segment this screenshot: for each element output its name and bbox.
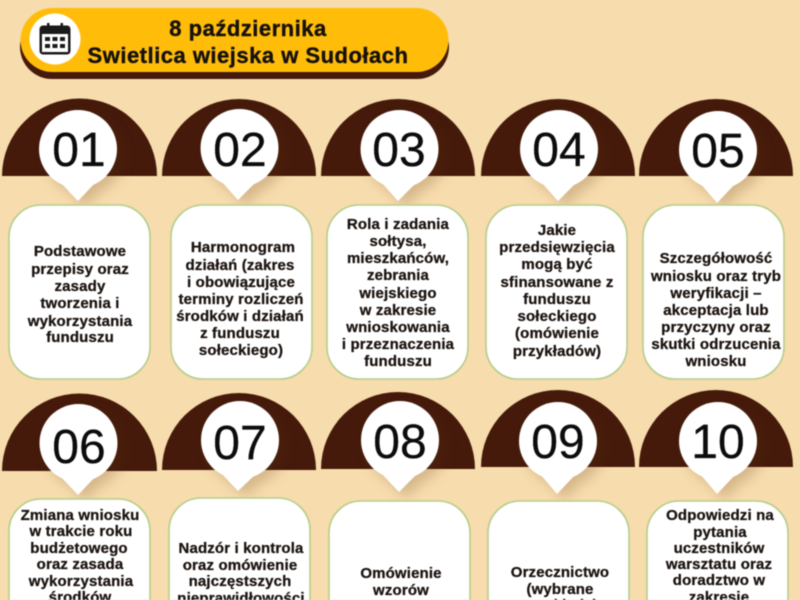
step 04: sołeckiego	[517, 308, 597, 325]
step 04: przedsięwzięcia	[499, 239, 615, 256]
step 05: przyczyny oraz	[661, 319, 771, 336]
step 10: doradztwo w	[673, 572, 765, 589]
heading: Swietlica wiejska w Sudołach	[88, 43, 408, 68]
step 04: Jakie	[538, 222, 576, 239]
step 05: wniosku oraz tryb	[650, 268, 781, 285]
step 04: 04	[532, 124, 586, 177]
step 02: Harmonogram	[191, 239, 295, 256]
step 06	[2, 394, 157, 600]
step 09: Orzecznictwo	[511, 564, 609, 581]
step 05: akceptacja lub	[663, 302, 769, 319]
step 06: budżetowego	[30, 540, 128, 557]
step 02: środków i działań	[176, 308, 304, 325]
step 04: mogą być	[521, 256, 593, 273]
step 05: wniosku	[684, 353, 747, 370]
step 04	[481, 99, 635, 379]
step 03: i przeznaczenia	[342, 336, 455, 353]
step 03	[321, 99, 475, 379]
icon: calendar	[30, 14, 80, 64]
step 03: Rola i zadania	[347, 216, 450, 233]
step 10: uczestników	[674, 540, 765, 557]
step 02	[162, 99, 316, 379]
step 02: i obowiązujące	[187, 274, 295, 291]
step 01: 01	[52, 124, 106, 177]
step 07: Nadzór i kontrola	[178, 540, 304, 557]
step 04: funduszu	[523, 291, 591, 308]
step 07: 07	[213, 417, 267, 470]
step 08: wzorów	[372, 582, 429, 599]
step 09: (wybrane	[526, 581, 594, 598]
step 08: Omówienie	[360, 565, 442, 582]
step 01: Podstawowe	[34, 243, 126, 260]
step 06: 06	[52, 421, 106, 474]
step 03: zebrania	[367, 267, 430, 284]
step 09	[481, 390, 635, 600]
heading: 8 października	[169, 16, 327, 41]
step 03: funduszu	[364, 353, 432, 370]
step 10: Odpowiedzi na	[666, 507, 774, 524]
step 02: sołeckiego)	[199, 342, 283, 359]
step 05: weryfikacji –	[669, 285, 762, 302]
step 07: najczęstszych	[189, 573, 291, 590]
step 05: Szczegółowość	[660, 250, 772, 267]
step 02: z funduszu	[200, 325, 280, 342]
step 01: funduszu	[46, 329, 114, 346]
step 03: wnioskowania	[345, 319, 450, 336]
header banner	[20, 8, 449, 79]
step 07	[162, 393, 316, 600]
step 05: skutki odrzucenia	[651, 336, 781, 353]
step 03: 03	[372, 124, 426, 177]
step 03: wiejskiego	[358, 285, 437, 302]
step 10: 10	[691, 416, 745, 469]
step 02: terminy rozliczeń	[178, 291, 304, 308]
step 01: tworzenia i	[40, 295, 120, 312]
step 06: w trakcie roku	[29, 523, 132, 540]
step 03: w zakresie	[359, 302, 436, 319]
step 01: przepisy oraz	[31, 261, 129, 278]
step 01: zasady	[55, 278, 106, 295]
step 02: 02	[213, 124, 267, 177]
step 03: sołtysa,	[369, 233, 427, 250]
heading	[88, 16, 408, 68]
step 01: wykorzystania	[27, 313, 133, 330]
step 04: (omówienie	[515, 325, 599, 342]
step 03: mieszkańców,	[347, 250, 449, 267]
step 06: wykorzystania	[28, 573, 134, 590]
step 01	[2, 98, 157, 379]
step 08: 08	[373, 416, 427, 469]
step 04: przykładów)	[513, 343, 601, 360]
step 10: pytania	[693, 524, 747, 541]
step 05	[639, 99, 793, 379]
step 06: Zmiana wniosku	[21, 507, 139, 524]
step 07: oraz omówienie	[183, 557, 297, 574]
step 04: sfinansowane z	[501, 274, 613, 291]
step 10: warsztatu oraz	[665, 556, 772, 573]
step 05: 05	[691, 125, 745, 178]
step 02: działań (zakres	[186, 257, 294, 274]
step 06: oraz zasada	[37, 556, 124, 573]
step 10	[639, 390, 793, 600]
step 08	[321, 392, 475, 600]
step 09: 09	[531, 416, 585, 469]
